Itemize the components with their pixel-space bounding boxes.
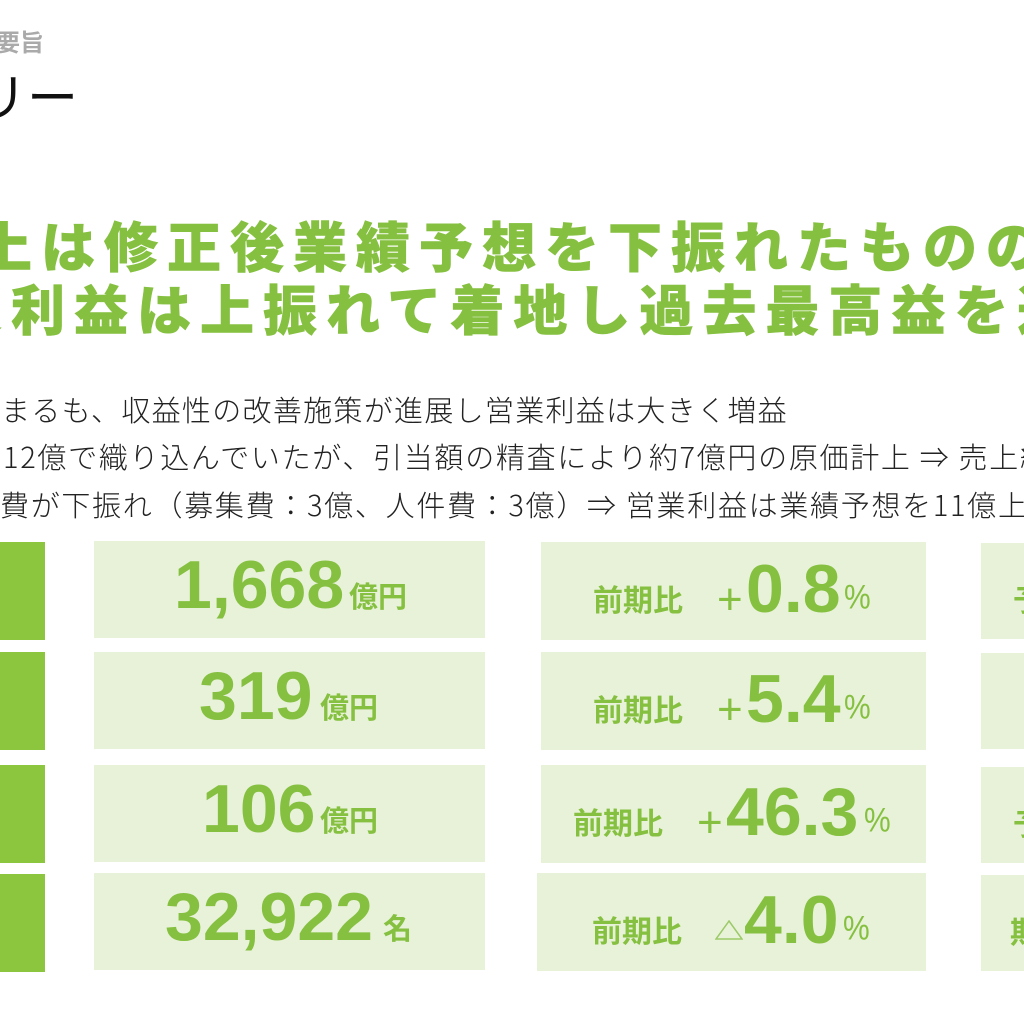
change panel: net profit: 46.3 (726, 774, 858, 850)
value panel: net profit: 106 (202, 771, 315, 847)
row label bar: headcount (0, 874, 45, 972)
change panel: operating profit: 前期比 (593, 686, 683, 730)
value panel: net profit (94, 765, 485, 862)
value panel: revenue: 1,668 (174, 547, 344, 623)
forecast panel: headcount (981, 875, 1024, 971)
value panel: revenue (94, 541, 485, 638)
change panel: net profit (541, 765, 926, 863)
change panel: headcount: % (843, 909, 870, 947)
change panel: revenue: 前期比 (593, 576, 683, 620)
change panel: operating profit: % (844, 688, 871, 726)
change panel: revenue: % (844, 578, 871, 616)
forecast panel: revenue (981, 543, 1024, 639)
value panel: headcount (94, 873, 485, 970)
change panel: operating profit (541, 652, 926, 750)
value panel: net profit: 億円 (320, 798, 378, 840)
change panel: operating profit: + (717, 685, 743, 734)
change panel: net profit: + (697, 798, 723, 847)
value panel: headcount: 名 (383, 906, 412, 948)
change panel: headcount: 4.0 (744, 882, 839, 958)
change panel: headcount (537, 873, 926, 971)
body text line 1: まるも、収益性の改善施策が進展し営業利益は大きく増益 (1, 388, 788, 430)
value panel: operating profit: 319 (199, 658, 312, 734)
change panel: net profit: % (864, 801, 891, 839)
forecast panel: operating profit (981, 653, 1024, 749)
body text line 2: 12億で織り込んでいたが、引当額の精査により約7億円の原価計上 ⇒ 売上総 (3, 435, 1024, 477)
change panel: operating profit: 5.4 (746, 661, 841, 737)
value panel: operating profit: 億円 (320, 685, 378, 727)
forecast panel: net profit (981, 767, 1024, 863)
value panel: headcount: 32,922 (165, 879, 373, 955)
change panel: revenue: + (717, 575, 743, 624)
change panel: headcount: 前期比 (592, 907, 682, 951)
change panel: revenue: 0.8 (746, 551, 841, 627)
row label bar: net profit (0, 765, 45, 863)
row label bar: operating profit (0, 652, 45, 750)
change panel: revenue (541, 542, 926, 640)
value panel: operating profit (94, 652, 485, 749)
icon: triangle (715, 920, 743, 940)
value panel: revenue: 億円 (349, 574, 407, 616)
change panel: net profit: 前期比 (573, 799, 663, 843)
row label bar: revenue (0, 542, 45, 640)
